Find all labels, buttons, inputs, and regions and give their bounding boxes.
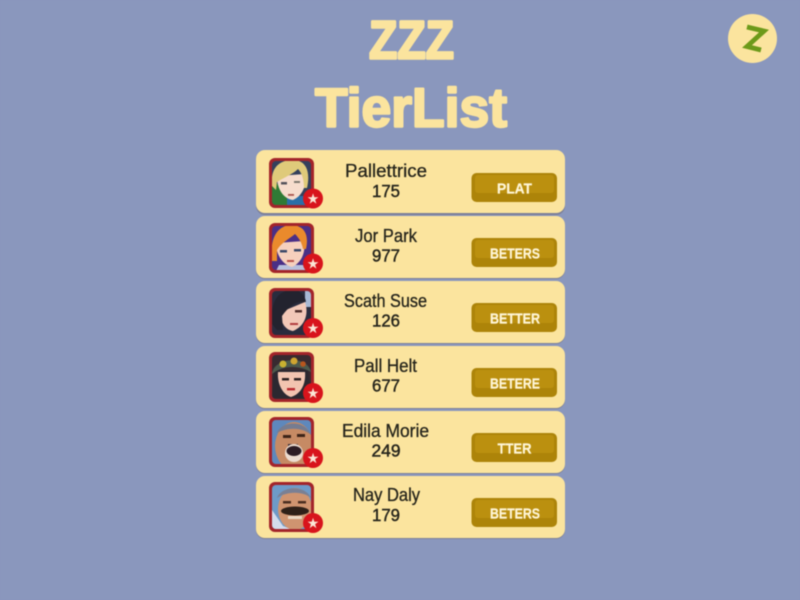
avatar: shouting character	[269, 417, 314, 470]
row 3: Scath Suse	[256, 281, 565, 344]
player name and score: 126	[372, 310, 400, 330]
icon: red star badge: ★	[307, 190, 319, 206]
icon: red star badge	[303, 448, 323, 468]
tier button: TTER	[472, 433, 557, 462]
icon: red star badge: ★	[307, 256, 319, 272]
player name and score: Nay Daly	[353, 485, 420, 505]
player name and score: Edila Morie	[342, 421, 429, 441]
avatar: moustached character	[269, 482, 314, 532]
tier button: BETERS: BETERS	[490, 246, 540, 262]
player name and score: 977	[372, 246, 400, 266]
icon: red star badge: ★	[307, 385, 319, 401]
icon: red star badge: ★	[307, 320, 319, 336]
tier button: BETTER: BETTER	[490, 310, 540, 328]
tier button: BETERE: BETERE	[490, 376, 540, 392]
avatar: orange-haired character	[269, 223, 314, 273]
player name and score	[342, 421, 429, 460]
icon: red star badge	[303, 383, 323, 403]
player name and score	[353, 485, 420, 525]
player name and score: 677	[372, 376, 400, 396]
row 2: Jor Park	[256, 216, 565, 279]
avatar: blond character	[269, 158, 314, 208]
panel: tier list rows	[256, 150, 565, 539]
player name and score	[354, 356, 417, 396]
player name and score: 179	[372, 505, 400, 525]
player name and score: 175	[372, 181, 400, 201]
icon: Z logo badge	[728, 14, 777, 63]
row 5: Edila Morie	[256, 411, 565, 474]
tier button: BETTER	[472, 303, 557, 332]
player name and score	[344, 291, 427, 330]
tier button: BETERS	[472, 238, 557, 267]
row 1: Pallettrice	[256, 150, 565, 215]
avatar: black-haired character	[269, 288, 314, 338]
tier button: TTER: TTER	[498, 440, 532, 458]
player name and score	[355, 226, 418, 266]
row 6: Nay Daly	[256, 476, 565, 539]
player name and score: Scath Suse	[344, 291, 427, 311]
player name and score: Pallettrice	[345, 161, 427, 181]
icon: red star badge	[303, 513, 323, 533]
icon: red star badge	[303, 318, 323, 338]
title: ZZZ: ZZZ	[369, 10, 454, 70]
tier button: PLAT: PLAT	[497, 180, 532, 198]
icon: red star badge: ★	[307, 450, 319, 466]
player name and score: 249	[372, 440, 400, 460]
player name and score: Pall Helt	[354, 356, 417, 376]
avatar: character with camo cap	[269, 352, 314, 402]
tier button: BETERS: BETERS	[490, 506, 540, 522]
tier button: BETERS	[472, 498, 557, 527]
title: TierList: TierList	[315, 76, 507, 138]
row 4: Pall Helt	[256, 346, 565, 409]
icon: red star badge	[303, 254, 323, 274]
icon: red star badge: ★	[307, 515, 319, 531]
tier button: BETERE	[472, 368, 557, 397]
player name and score: Jor Park	[355, 226, 418, 246]
player name and score	[345, 161, 427, 201]
tier button: PLAT	[472, 173, 557, 202]
icon: red star badge	[303, 188, 323, 208]
